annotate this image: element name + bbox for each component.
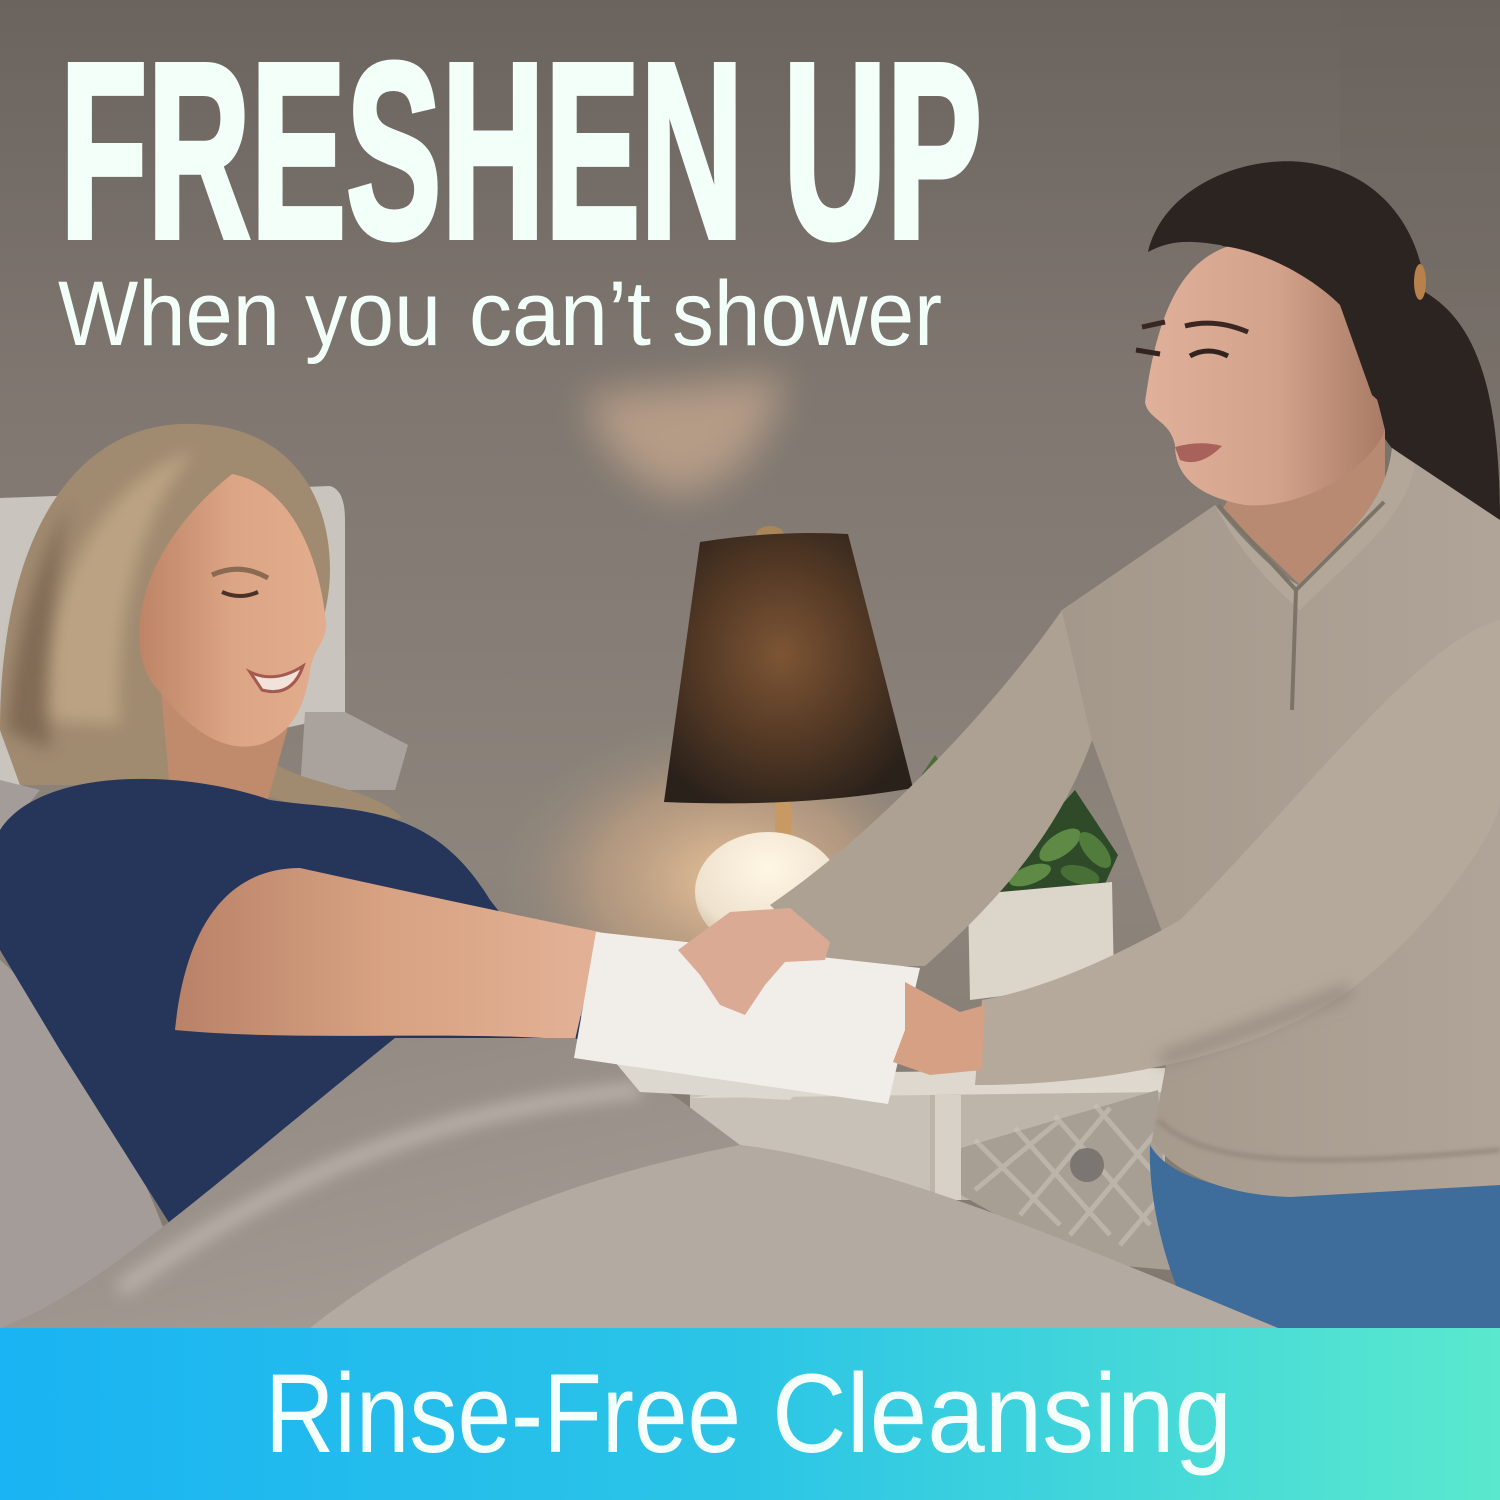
back pillow (300, 712, 408, 790)
hands (678, 908, 985, 1075)
collar (1215, 448, 1415, 610)
cleansing wipe (574, 932, 920, 1104)
hair tie (1414, 264, 1426, 300)
caregiver (770, 161, 1500, 1197)
hair highlight (40, 450, 195, 725)
sweater hem (1158, 1120, 1500, 1160)
lips (1175, 443, 1222, 462)
banner text (265, 1351, 1232, 1476)
hair shadow (6, 505, 70, 750)
neck (1222, 430, 1385, 585)
face (139, 474, 326, 747)
subtitle: When (58, 263, 280, 365)
smile (250, 666, 303, 692)
bottom banner (0, 1328, 1500, 1500)
torso sweater (1062, 448, 1500, 1197)
caregiver top hand (678, 908, 830, 1015)
blanket (0, 1038, 1278, 1328)
eyebrows (1142, 322, 1248, 332)
shirt (0, 779, 600, 1240)
eye (222, 592, 258, 596)
arm (175, 868, 600, 1040)
upper arm (770, 610, 1092, 966)
subtitle: shower (672, 263, 942, 365)
ponytail and hair back (1148, 161, 1500, 522)
eyes (1136, 350, 1228, 356)
subtitle (58, 263, 942, 365)
hair side (1222, 200, 1400, 420)
bedside lamp (664, 526, 913, 952)
clasped hands (893, 982, 985, 1075)
eyebrow (212, 569, 268, 578)
lower arm (975, 620, 1500, 1085)
headboard (0, 486, 345, 790)
banner text: Rinse-Free (265, 1351, 741, 1476)
potted plant (905, 755, 1118, 1000)
neck (160, 680, 290, 810)
nightstand (690, 1068, 1170, 1270)
banner text: Cleansing (772, 1351, 1232, 1476)
lower pillow (0, 780, 168, 1328)
sleeve fold (1160, 990, 1350, 1060)
hair (0, 424, 402, 819)
jeans (1150, 1145, 1500, 1328)
seated woman (0, 424, 600, 1240)
face (1145, 245, 1385, 505)
subtitle: can’t (469, 263, 651, 365)
subtitle: you (305, 263, 441, 365)
zipper (1218, 502, 1384, 710)
